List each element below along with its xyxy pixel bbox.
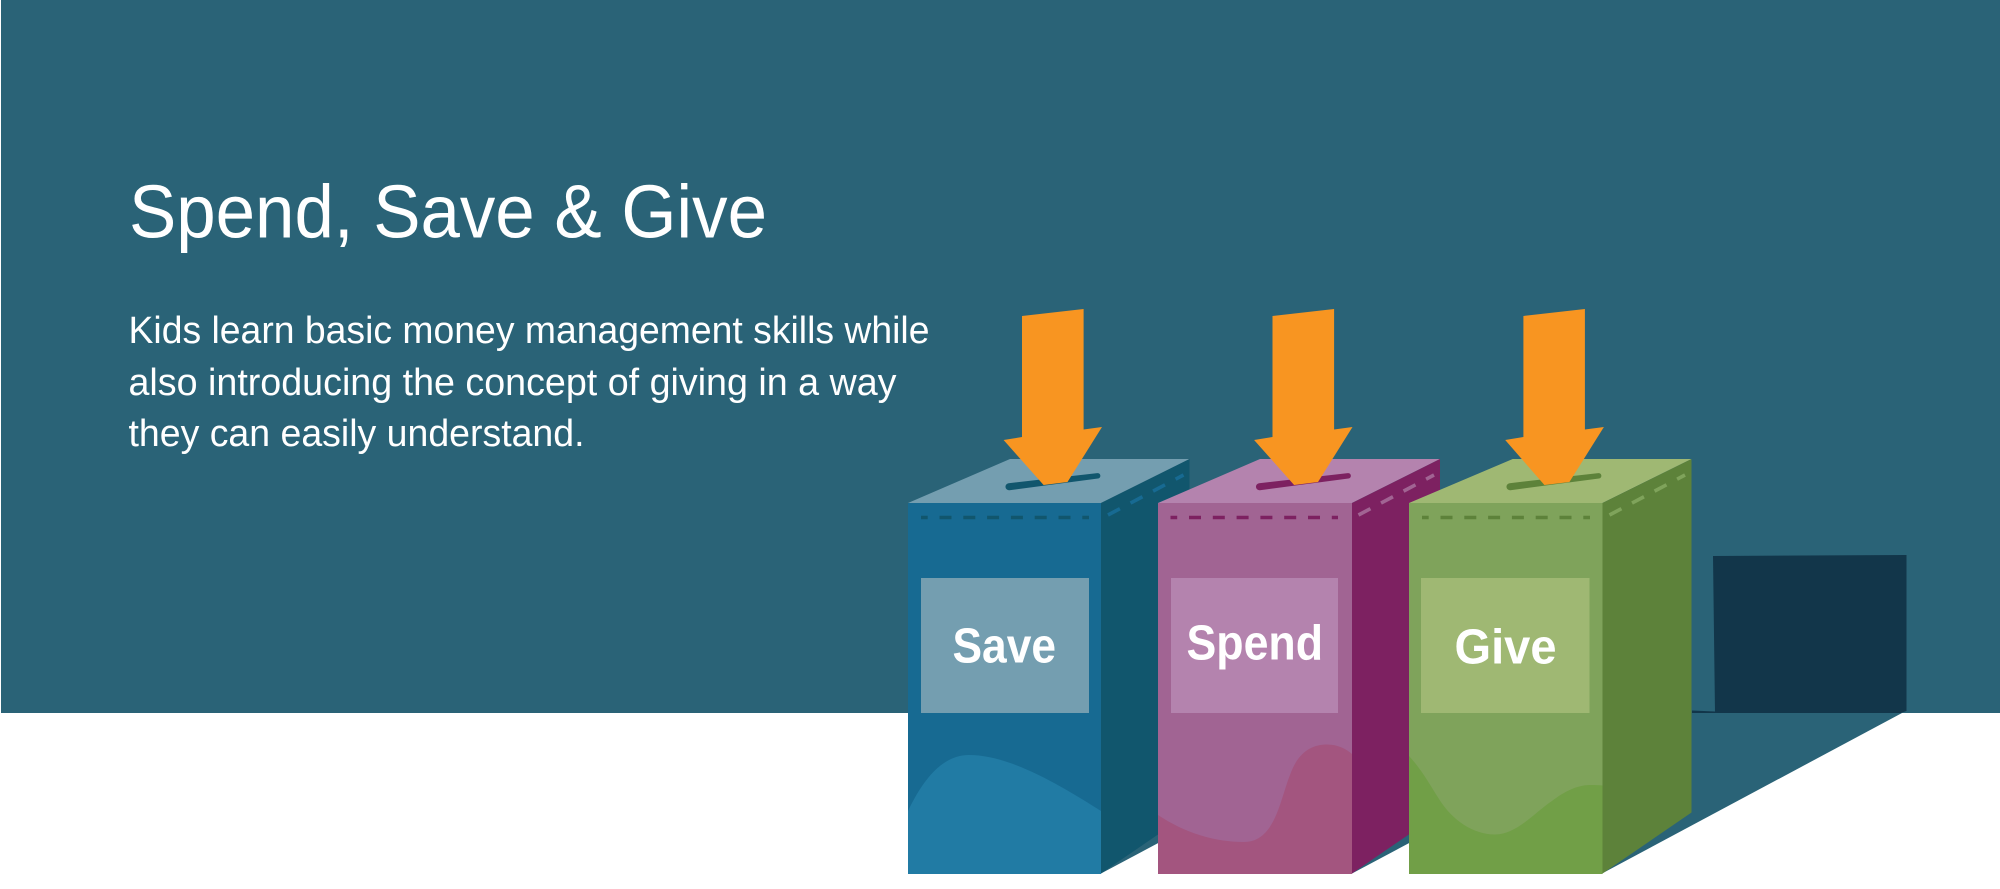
description text: also introducing the concept of giving in a way [128, 362, 896, 404]
spend arrow [1254, 309, 1352, 485]
dark rectangle behind boxes [1692, 555, 1906, 713]
give box top face [1409, 459, 1692, 503]
save box top face [908, 459, 1190, 503]
save box front stitching [921, 516, 1089, 519]
spend box top face [1158, 459, 1440, 503]
give box side face [1602, 459, 1692, 874]
save label card [921, 578, 1089, 713]
give box front face [1409, 503, 1602, 874]
spend box side face [1352, 459, 1440, 874]
give label text: Give [1454, 620, 1556, 674]
box shadows [1101, 713, 1902, 874]
give arrow [1505, 309, 1604, 485]
give label card [1421, 578, 1590, 713]
box: Give [1409, 309, 1692, 874]
description text: they can easily understand. [128, 413, 584, 455]
spend slot [1256, 473, 1351, 490]
spend box front face [1158, 503, 1352, 874]
save arrow [1004, 309, 1102, 485]
save label text: Save [952, 620, 1056, 674]
spend box front stitching [1170, 516, 1338, 519]
spend label text: Spend [1186, 616, 1323, 670]
spend box side stitching [1358, 475, 1434, 515]
spend box wave [1158, 744, 1352, 874]
give box wave [1409, 756, 1602, 874]
give box side stitching [1610, 475, 1685, 515]
description text [128, 310, 930, 455]
give slot [1506, 473, 1601, 490]
box: Save [908, 309, 1190, 874]
description text: Kids learn basic money management skills while [128, 310, 930, 352]
box: Spend [1158, 309, 1440, 874]
save box front face [908, 503, 1101, 874]
save box side face [1101, 459, 1190, 874]
give box front stitching [1422, 516, 1590, 519]
save box side stitching [1108, 475, 1184, 515]
spend label card [1171, 578, 1338, 713]
save slot [1005, 473, 1100, 490]
save box wave [908, 755, 1101, 874]
title: Spend, Save & Give [129, 170, 767, 254]
